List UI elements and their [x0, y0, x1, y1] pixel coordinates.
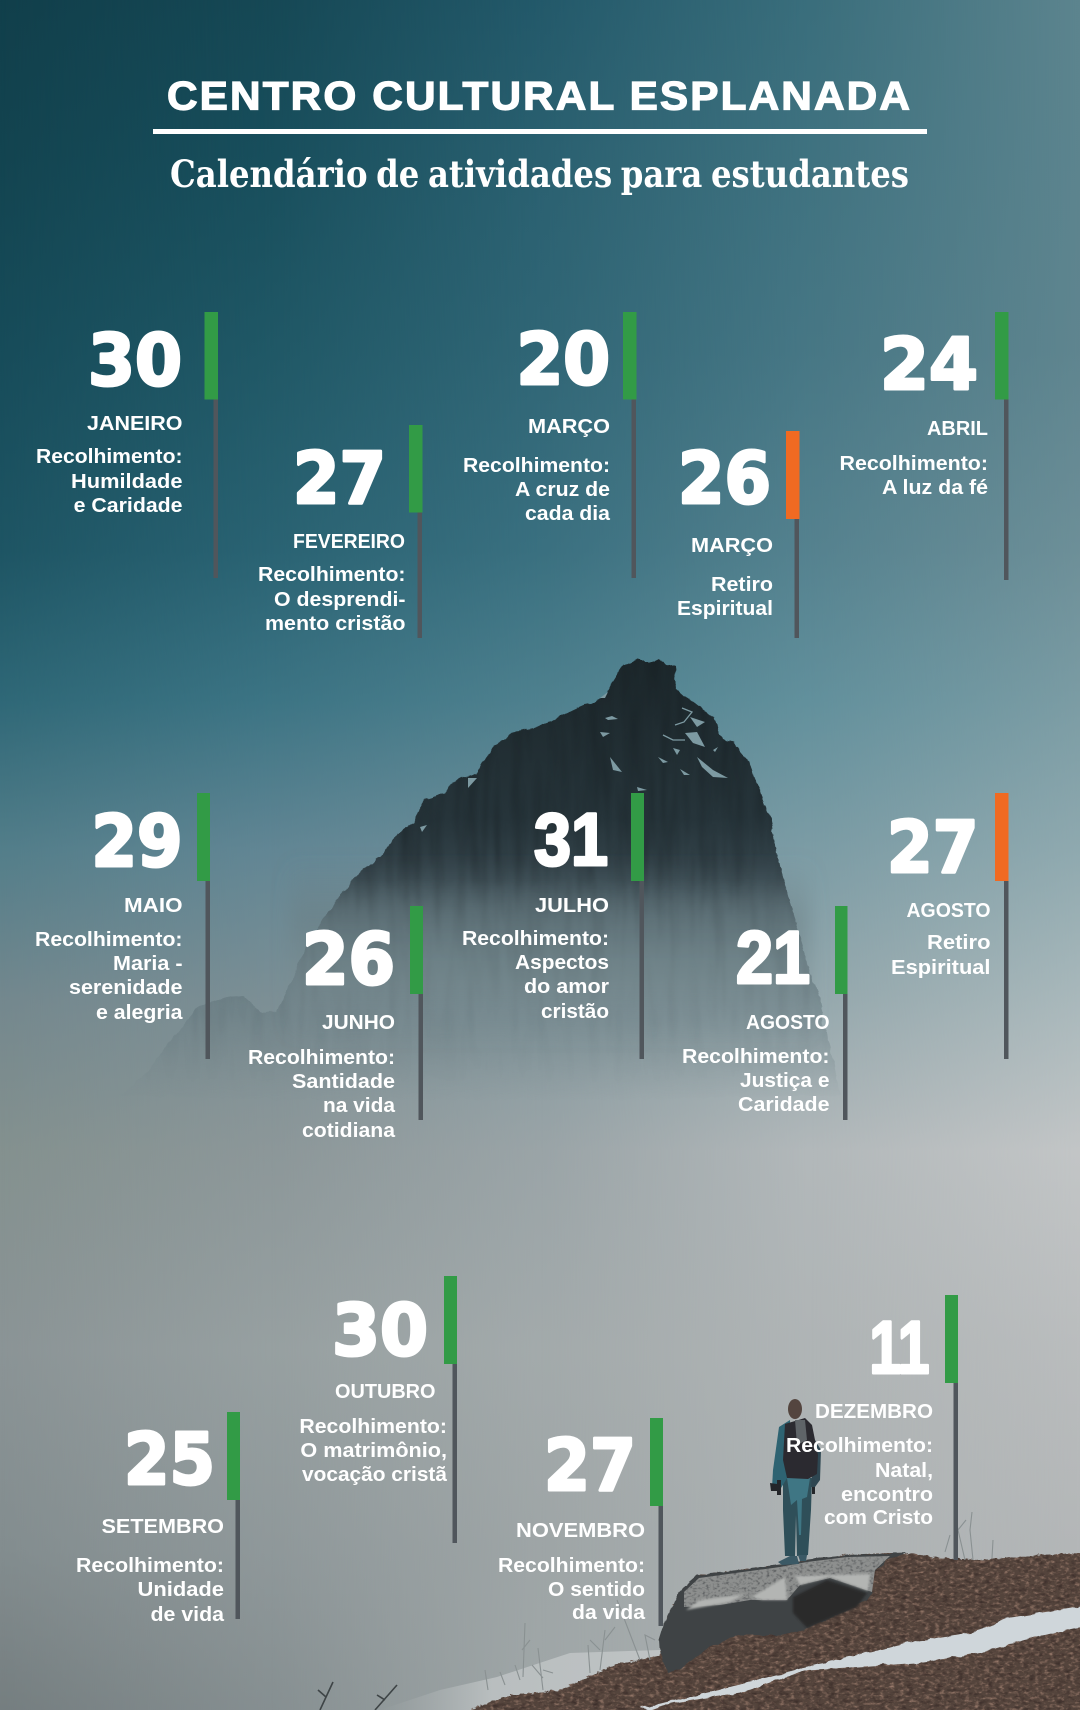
event: 24 abril: [840, 312, 1008, 580]
hiker legs: [783, 1478, 812, 1556]
description: [463, 455, 611, 525]
description: mento cristão: [265, 613, 406, 635]
description: Recolhimento:: [840, 453, 988, 475]
flag pole: [452, 1363, 457, 1543]
title underline: [153, 129, 927, 134]
description: [891, 932, 990, 979]
thin snow lines on the peak: [663, 708, 692, 740]
month: AGOSTO: [906, 900, 990, 922]
subtitle: Calendário de atividades para estudantes: [170, 152, 909, 196]
description: serenidade: [69, 977, 182, 999]
green flag: [197, 793, 210, 881]
month: OUTUBRO: [335, 1381, 436, 1403]
event: 26 março: [677, 431, 800, 638]
description: Espiritual: [891, 957, 990, 979]
month: MARÇO: [691, 535, 773, 557]
bright lichen patches: [686, 1574, 870, 1610]
boulder shadow: [793, 1580, 867, 1628]
dry twigs: [318, 1512, 993, 1710]
description: Recolhimento:: [248, 1047, 395, 1069]
description: O sentido: [548, 1579, 645, 1601]
description: [462, 928, 609, 1023]
foreground hillside: [470, 1553, 1080, 1710]
event: 30 janeiro: [36, 312, 218, 578]
flag pole: [632, 399, 636, 578]
description: Espiritual: [677, 598, 773, 620]
description: da vida: [572, 1602, 646, 1624]
description: Recolhimento:: [35, 929, 182, 951]
description: [498, 1555, 646, 1624]
description: cada dia: [525, 503, 611, 525]
fog over the mountain base: [290, 860, 810, 1040]
date number: 26: [302, 918, 395, 1001]
month: JUNHO: [322, 1012, 395, 1034]
description: Recolhimento:: [786, 1435, 933, 1457]
description: Santidade: [292, 1071, 395, 1093]
hiker jacket arms: [772, 1420, 792, 1488]
flag pole: [206, 880, 210, 1059]
green flag: [410, 906, 423, 994]
description: [840, 453, 988, 499]
event: 11 dezembro: [786, 1295, 958, 1560]
description: Justiça e: [740, 1070, 830, 1092]
green flag: [650, 1418, 663, 1506]
green flag: [631, 793, 644, 881]
flag pole: [1004, 399, 1008, 580]
description: Recolhimento:: [76, 1555, 224, 1577]
month: JANEIRO: [87, 413, 182, 435]
description: do amor: [524, 976, 609, 998]
description: com Cristo: [824, 1507, 933, 1529]
description: vocação cristã: [302, 1464, 448, 1486]
description: O matrimônio,: [300, 1440, 447, 1462]
hiker head: [788, 1399, 802, 1419]
description: [786, 1435, 933, 1529]
description: Recolhimento:: [299, 1416, 447, 1438]
description: A cruz de: [515, 479, 610, 501]
description: [35, 929, 183, 1024]
dark foreground twigs: [318, 1682, 397, 1710]
hiker hand and straps: [770, 1480, 815, 1495]
month: NOVEMBRO: [516, 1520, 645, 1542]
green flag: [444, 1276, 457, 1364]
description: na vida: [323, 1095, 396, 1117]
green flag: [409, 425, 422, 512]
event: 27 agosto: [887, 793, 1008, 1059]
month: ABRIL: [927, 418, 988, 440]
green flag: [945, 1295, 958, 1383]
date number: 27: [887, 806, 978, 889]
event: 30 outubro: [299, 1276, 457, 1543]
flag pole: [418, 993, 423, 1120]
description: e alegria: [96, 1002, 183, 1024]
description: Retiro: [927, 932, 990, 954]
date number: 26: [678, 437, 771, 520]
month: SETEMBRO: [102, 1516, 224, 1538]
event: 27 fevereiro: [258, 425, 422, 638]
event: 27 novembro: [498, 1418, 663, 1626]
hiker trouser highlight: [787, 1478, 810, 1535]
description: [258, 564, 406, 635]
green flag: [995, 312, 1008, 400]
date number: 27: [544, 1424, 636, 1507]
event: 31 julho: [462, 793, 644, 1059]
description: Humildade: [71, 471, 182, 493]
flag pole: [794, 518, 799, 638]
flag pole: [214, 399, 218, 578]
description: Recolhimento:: [463, 455, 610, 477]
green flag: [204, 312, 218, 400]
description: Caridade: [738, 1094, 830, 1116]
hiker backpack: [783, 1418, 818, 1479]
flag pole: [658, 1505, 663, 1626]
boulder: [659, 1553, 907, 1673]
description: Natal,: [875, 1460, 933, 1482]
description: [299, 1416, 448, 1486]
event: 26 junho: [248, 906, 423, 1142]
description: Aspectos: [515, 952, 609, 974]
event: 29 maio: [35, 793, 210, 1059]
date number: 24: [880, 323, 978, 406]
description: cotidiana: [302, 1120, 396, 1142]
description: encontro: [841, 1484, 933, 1506]
flag pole: [640, 880, 644, 1059]
event: 25 setembro: [76, 1412, 240, 1626]
date number: 11: [870, 1306, 930, 1389]
month: JULHO: [535, 895, 609, 917]
description: Unidade: [138, 1579, 224, 1601]
event: 21 agosto: [682, 906, 848, 1120]
description: [682, 1046, 830, 1116]
distant snow slope: [380, 1650, 660, 1710]
icon: hiker standing on the boulder: [770, 1399, 821, 1565]
orange flag: [786, 431, 800, 519]
snow band on the hillside: [640, 1606, 1080, 1710]
date number: 29: [92, 800, 182, 883]
mountain peak in the fog: [120, 660, 840, 1100]
title: CENTRO CULTURAL ESPLANADA: [167, 74, 912, 118]
description: Retiro: [711, 574, 773, 596]
flag pole: [236, 1499, 240, 1619]
orange flag: [995, 793, 1008, 881]
snow patches on the peak: [420, 692, 728, 832]
date number: 30: [332, 1289, 428, 1372]
description: A luz da fé: [882, 477, 988, 499]
description: cristão: [541, 1001, 609, 1023]
green flag: [623, 312, 636, 400]
green flag: [835, 906, 848, 994]
description: de vida: [150, 1604, 225, 1626]
description: [76, 1555, 225, 1626]
month: DEZEMBRO: [815, 1401, 933, 1423]
description: Recolhimento:: [462, 928, 609, 950]
description: O desprendi-: [274, 589, 406, 611]
month: AGOSTO: [746, 1012, 830, 1034]
hiker right arm: [811, 1440, 821, 1487]
date number: 20: [516, 318, 610, 401]
green flag: [227, 1412, 240, 1500]
description: e Caridade: [74, 495, 182, 517]
description: [677, 574, 773, 620]
hiker backpack top highlight: [795, 1420, 807, 1445]
date number: 21: [736, 916, 810, 999]
month: MAIO: [124, 895, 182, 917]
flag pole: [954, 1382, 958, 1560]
date number: 27: [293, 437, 386, 520]
month: MARÇO: [528, 416, 610, 438]
date number: 30: [88, 319, 182, 402]
date number: 25: [124, 1418, 215, 1501]
description: Recolhimento:: [498, 1555, 645, 1577]
hiker boots: [778, 1555, 807, 1565]
date number: 31: [534, 798, 608, 881]
description: Recolhimento:: [682, 1046, 830, 1068]
description: [248, 1047, 396, 1142]
month: FEVEREIRO: [293, 531, 405, 553]
event: 20 março: [463, 312, 636, 578]
description: [36, 446, 182, 517]
description: Maria -: [113, 953, 182, 975]
boulder body: [659, 1553, 907, 1673]
flag pole: [843, 993, 848, 1120]
flag pole: [1004, 880, 1008, 1059]
description: Recolhimento:: [36, 446, 182, 468]
flag pole: [418, 512, 422, 638]
description: Recolhimento:: [258, 564, 406, 586]
mottled lichen on boulder top: [684, 1556, 890, 1607]
